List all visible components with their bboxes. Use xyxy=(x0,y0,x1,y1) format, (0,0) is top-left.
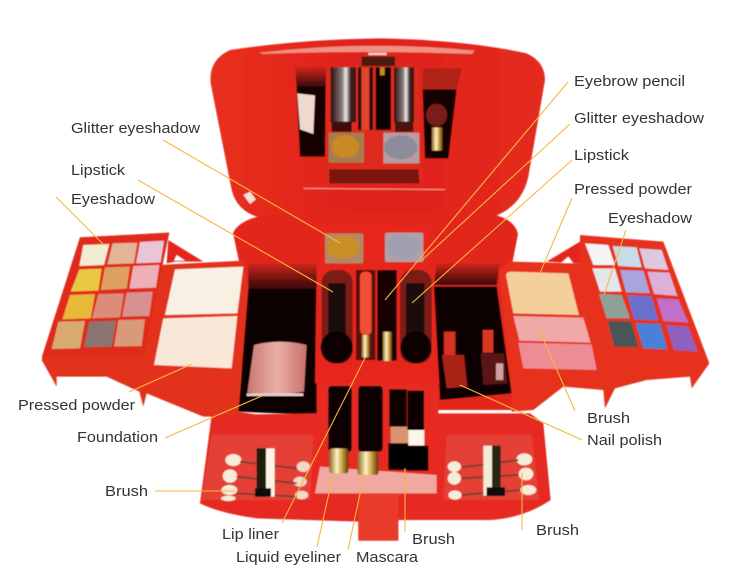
center tray with pots, lipsticks and pencils xyxy=(315,220,439,383)
right sponge bay xyxy=(443,435,539,500)
drawer shell xyxy=(200,380,551,541)
drawer pull tab xyxy=(358,493,398,541)
open lid with mirror xyxy=(210,38,545,217)
glitter eyeshadow pots xyxy=(325,233,423,263)
line: brush right upper xyxy=(538,327,575,411)
pressed powder pans xyxy=(165,267,243,315)
right mirror window with nail polish reflection xyxy=(423,68,462,158)
lipsticks xyxy=(321,270,432,363)
line: brush left xyxy=(155,490,235,492)
lid screw highlight xyxy=(243,192,256,204)
label: glitter eyeshadow right: Glitter eyeshadow xyxy=(574,110,704,127)
line: lip liner xyxy=(282,358,365,523)
label: lipstick left: Lipstick xyxy=(71,162,126,179)
reflected glitter pots xyxy=(329,133,364,163)
lip liner pencil xyxy=(356,270,375,360)
left mirror window xyxy=(296,67,326,157)
line: lipstick left xyxy=(138,180,333,292)
eyebrow pencil xyxy=(377,270,397,361)
labels xyxy=(18,73,704,566)
tray body xyxy=(42,233,270,417)
left sponge bay xyxy=(202,435,313,501)
leader lines xyxy=(56,82,626,550)
label: brush center: Brush xyxy=(412,531,455,548)
lid top highlight xyxy=(260,46,475,54)
center tray red panel xyxy=(315,220,439,383)
label: eyebrow pencil: Eyebrow pencil xyxy=(574,73,685,90)
line: liquid eyeliner xyxy=(317,475,333,547)
right palette tray xyxy=(498,235,709,412)
left palette tray xyxy=(42,233,270,417)
label: foundation: Foundation xyxy=(77,429,158,446)
label: eyeshadow right: Eyeshadow xyxy=(608,210,692,227)
label: nail polish: Nail polish xyxy=(587,432,662,449)
line: glitter eyeshadow right xyxy=(422,124,570,260)
label: lip liner: Lip liner xyxy=(222,526,279,543)
line: eyeshadow right xyxy=(604,230,626,295)
label: pressed powder left: Pressed powder xyxy=(18,397,135,414)
label: eyeshadow left: Eyeshadow xyxy=(71,191,155,208)
line: pressed powder right xyxy=(540,198,572,273)
line: nail polish xyxy=(460,385,582,440)
eyeshadow colours xyxy=(585,243,698,352)
line: mascara xyxy=(348,475,364,550)
stand struts xyxy=(167,240,203,263)
main body of the case xyxy=(233,214,520,410)
right compartment with nail polish xyxy=(434,263,512,400)
makeup kit photo illustration xyxy=(42,38,709,541)
label: brush left: Brush xyxy=(105,483,148,500)
left compartment with foundation xyxy=(238,263,318,415)
nail polish bottles xyxy=(444,332,455,355)
lid hinge clasp xyxy=(362,57,395,66)
reflected lipsticks xyxy=(331,67,356,122)
stand struts xyxy=(547,242,580,263)
liner and mascara tubes xyxy=(328,386,383,475)
label: brush right bottom: Brush xyxy=(536,522,579,539)
label: pressed powder right: Pressed powder xyxy=(574,181,692,198)
mirror bottom edge xyxy=(303,188,445,190)
center mirror panel xyxy=(325,67,424,183)
line: eyeshadow left xyxy=(56,197,104,245)
pressed powder and blush pans xyxy=(506,272,579,315)
tray body xyxy=(498,235,709,412)
lower drawer xyxy=(200,380,551,541)
brushes xyxy=(388,389,428,471)
line: brush right bottom xyxy=(521,473,523,530)
label: brush right upper: Brush xyxy=(587,410,630,427)
line: foundation xyxy=(165,395,264,438)
line: glitter eyeshadow left xyxy=(163,140,340,243)
palette face xyxy=(42,233,169,357)
reflected pencils xyxy=(358,67,373,130)
label: lipstick right: Lipstick xyxy=(574,147,630,164)
eyeshadow colours xyxy=(52,241,164,349)
line: lipstick right xyxy=(412,160,572,303)
label: liquid eyeliner: Liquid eyeliner xyxy=(236,549,341,566)
lid shell xyxy=(210,38,545,217)
line: pressed powder left xyxy=(129,364,192,392)
line: brush center xyxy=(404,468,406,532)
line: eyebrow pencil xyxy=(385,82,568,300)
center bay floor xyxy=(315,467,437,493)
label: mascara: Mascara xyxy=(356,549,419,566)
label: glitter eyeshadow left: Glitter eyeshadow xyxy=(71,120,200,137)
